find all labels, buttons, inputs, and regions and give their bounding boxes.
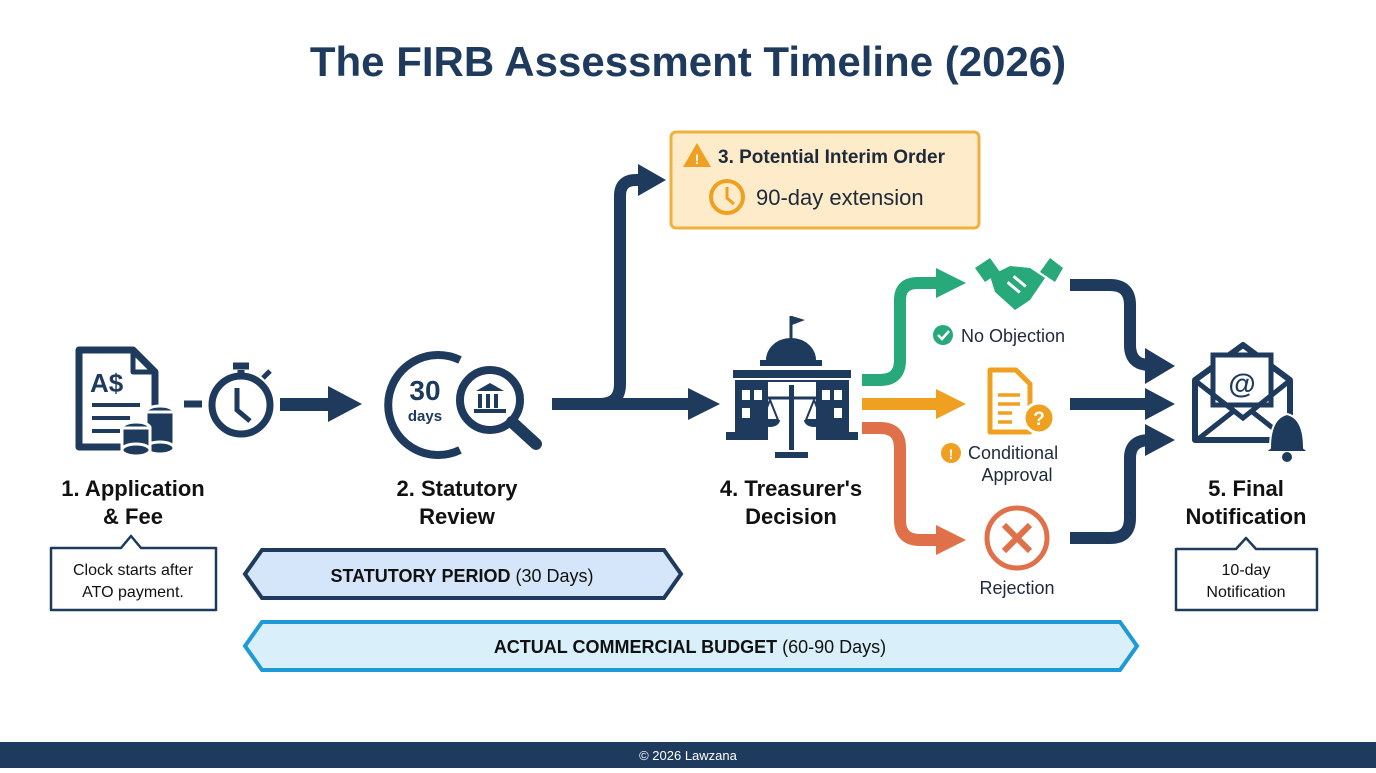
- icon: 30 days clock with magnifier: [388, 355, 536, 455]
- heading: step 5: 5. Final: [1208, 476, 1284, 501]
- footer: © 2026 Lawzana: [639, 748, 738, 763]
- icon: email with bell: [1195, 345, 1309, 462]
- heading: step 2: 2. Statutory: [396, 476, 518, 501]
- footer: [0, 742, 1376, 768]
- callout: 10-day notification: [1176, 538, 1317, 610]
- arrow: review to decision with branch to interim: [552, 180, 690, 404]
- label: conditional approval: Conditional: [968, 443, 1058, 463]
- heading: step 1: & Fee: [103, 504, 163, 529]
- icon: handshake: [975, 258, 1063, 310]
- panel: interim order: 90-day extension: [756, 185, 924, 210]
- icon: treasury building with scales: [726, 316, 858, 458]
- heading: step 4: Decision: [745, 504, 837, 529]
- heading: step 1: 1. Application: [61, 476, 205, 501]
- arrows: outcomes to notification: [1070, 285, 1155, 538]
- icon: email with bell: @: [1228, 368, 1256, 399]
- title: The FIRB Assessment Timeline (2026): [310, 38, 1066, 85]
- bar: statutory period: STATUTORY PERIOD (30 Days): [330, 566, 594, 586]
- callout: clock starts: Clock starts after: [73, 562, 194, 579]
- icon: 30 days clock with magnifier: 30: [409, 375, 441, 406]
- label: rejection: Rejection: [979, 578, 1055, 598]
- icon: application document with coins: A$: [90, 368, 124, 398]
- label: no objection: No Objection: [961, 326, 1065, 346]
- callout: 10-day notification: 10-day: [1222, 562, 1270, 579]
- label: conditional approval: [941, 443, 1058, 485]
- heading: step 2: Review: [419, 504, 496, 529]
- icon: rejection: [987, 508, 1047, 568]
- arrows: decision branches: [862, 283, 940, 540]
- bar: statutory period: [245, 550, 681, 598]
- callout: 10-day notification: Notification: [1206, 584, 1286, 601]
- panel: interim order: !: [695, 151, 699, 167]
- panel: interim order: [671, 132, 979, 228]
- callout: clock starts: ATO payment.: [82, 584, 184, 601]
- icon: conditional document: ?: [1033, 409, 1045, 430]
- panel: interim order: 3. Potential Interim Order: [718, 147, 946, 168]
- heading: step 5: Notification: [1186, 504, 1306, 529]
- label: conditional approval: !: [949, 446, 953, 462]
- arrow 1: [280, 386, 362, 422]
- bar: actual commercial budget: [245, 622, 1137, 670]
- icon: conditional document: [990, 370, 1054, 433]
- bar: actual commercial budget: ACTUAL COMMERCIAL BUDGET (60-90 Days): [494, 637, 886, 657]
- connector + stopwatch icon: [184, 366, 270, 434]
- heading: step 4: 4. Treasurer's: [720, 476, 862, 501]
- icon: application document with coins: [79, 350, 174, 456]
- callout: clock starts: [51, 536, 216, 610]
- label: conditional approval: Approval: [981, 465, 1053, 485]
- icon: 30 days clock with magnifier: days: [408, 408, 442, 425]
